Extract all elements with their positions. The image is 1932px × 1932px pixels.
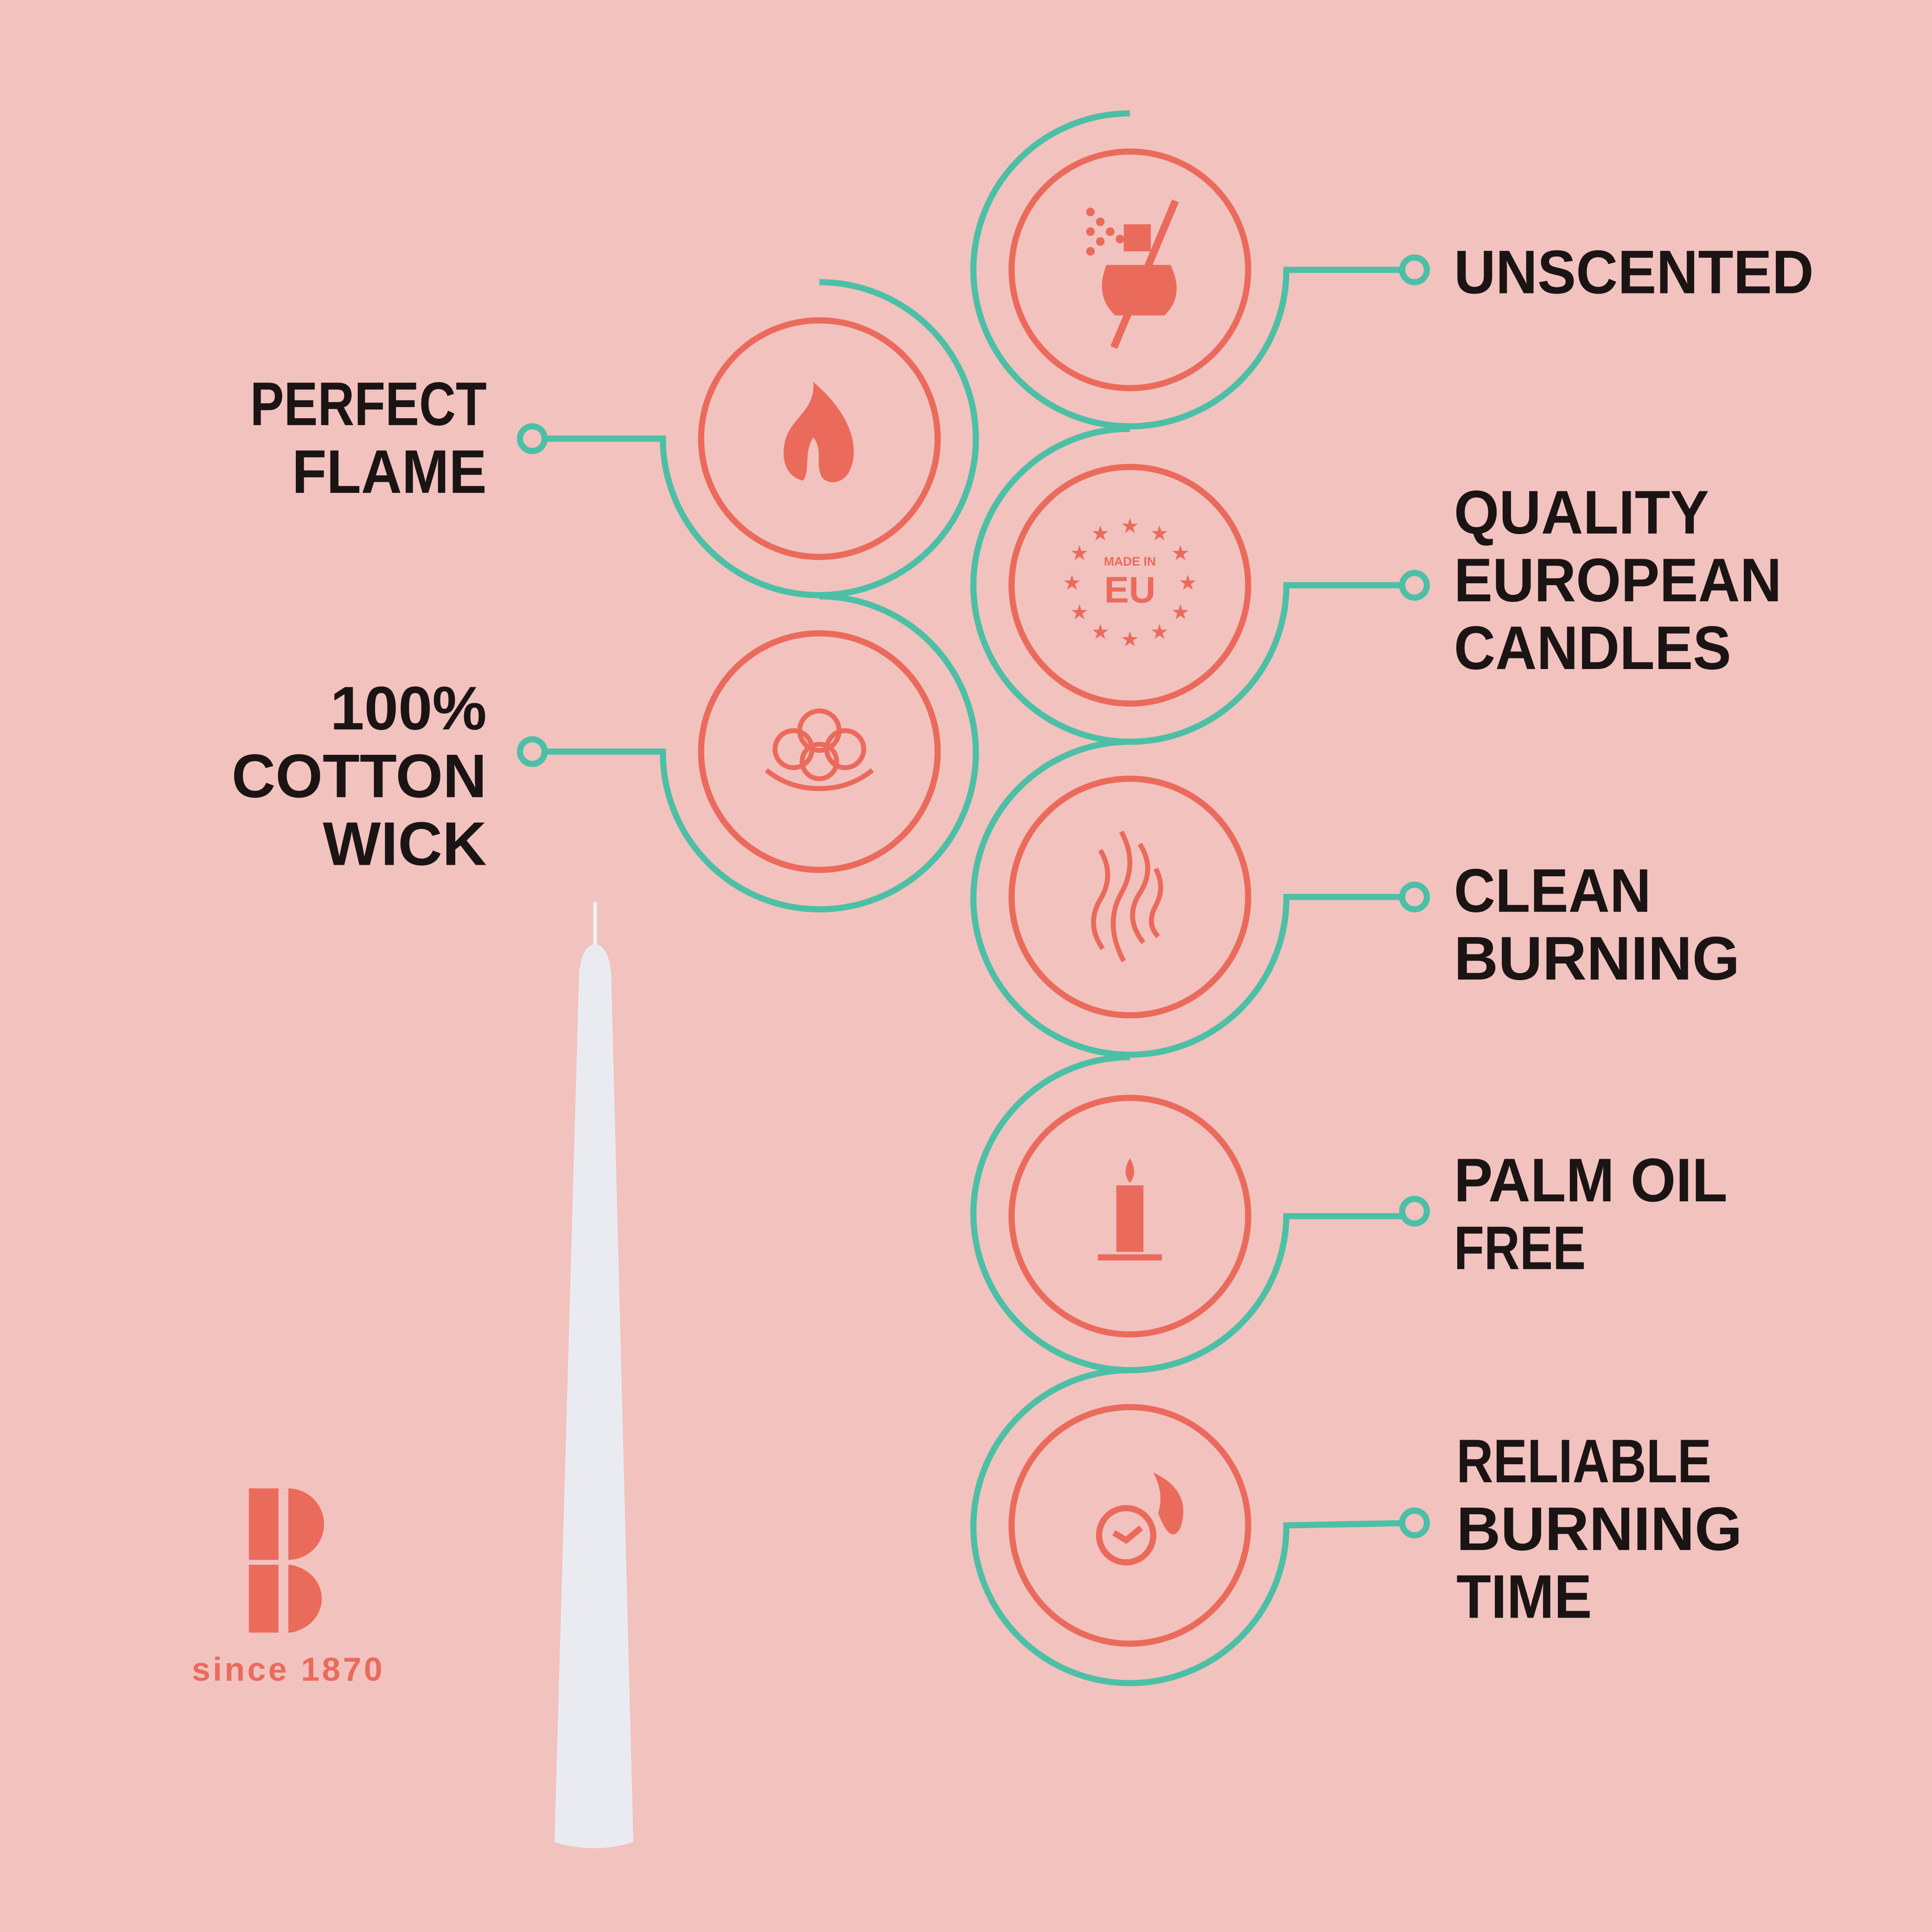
text: palm oil free: PALM OIL [1454, 1146, 1728, 1215]
icon: EU stars [1064, 516, 1196, 650]
panel: perfect flame [520, 282, 976, 595]
text: reliable burning time: RELIABLE [1456, 1427, 1711, 1496]
icon: EU stars: ★ [1071, 543, 1088, 564]
icon: EU stars: EU [1104, 569, 1155, 611]
logo [192, 1488, 385, 1688]
text: clean burning [1454, 857, 1740, 993]
panel: clean burning [973, 742, 1427, 1055]
icon: EU stars: ★ [1180, 573, 1196, 593]
icon: candle [1098, 1158, 1162, 1261]
text: reliable burning time: TIME [1456, 1562, 1592, 1631]
icon: EU stars: ★ [1151, 523, 1168, 544]
text: cotton wick: WICK [323, 810, 487, 879]
panel: cotton wick [520, 596, 976, 909]
text: clean burning: CLEAN [1454, 857, 1651, 925]
text: perfect flame: FLAME [292, 438, 487, 506]
icon: cotton [766, 711, 873, 789]
text: quality european candles: CANDLES [1454, 614, 1731, 682]
icon: flame [784, 382, 854, 482]
text: cotton wick [232, 674, 487, 879]
text: palm oil free: FREE [1454, 1214, 1586, 1282]
logo: since 1870 [192, 1651, 385, 1688]
icon: EU stars: ★ [1122, 516, 1138, 536]
text: quality european candles: QUALITY [1454, 478, 1709, 547]
icon: EU stars: ★ [1092, 622, 1109, 643]
icon: EU stars: ★ [1122, 630, 1138, 650]
icon: EU stars: ★ [1071, 602, 1088, 623]
icon: EU stars: ★ [1172, 602, 1189, 623]
panel: made in EU [973, 429, 1427, 742]
panel: unscented [973, 113, 1427, 427]
icon: EU stars: ★ [1092, 523, 1109, 544]
text: unscented: UNSCENTED [1454, 238, 1814, 306]
text: cotton wick: 100% [330, 674, 487, 743]
text: quality european candles: EUROPEAN [1454, 546, 1782, 615]
icon: no perfume [1086, 208, 1177, 315]
icon: EU stars: ★ [1151, 622, 1168, 643]
text: palm oil free [1454, 1146, 1728, 1282]
panel: palm oil free [973, 1057, 1427, 1370]
icon: EU stars: ★ [1064, 573, 1080, 593]
icon: clock with flame [1099, 1508, 1153, 1562]
text: reliable burning time [1456, 1427, 1742, 1631]
text: perfect flame: PERFECT [250, 370, 487, 439]
text: reliable burning time: BURNING [1456, 1495, 1742, 1563]
candle [555, 902, 633, 1848]
text: cotton wick: COTTON [232, 742, 487, 810]
icon: smoke [1093, 832, 1160, 961]
panel: reliable burning time [973, 1370, 1427, 1683]
text: clean burning: BURNING [1454, 925, 1740, 993]
text: perfect flame [250, 370, 487, 506]
text: quality european candles [1454, 478, 1782, 682]
icon: EU stars: MADE IN [1104, 555, 1156, 568]
icon: EU stars: ★ [1172, 543, 1189, 564]
